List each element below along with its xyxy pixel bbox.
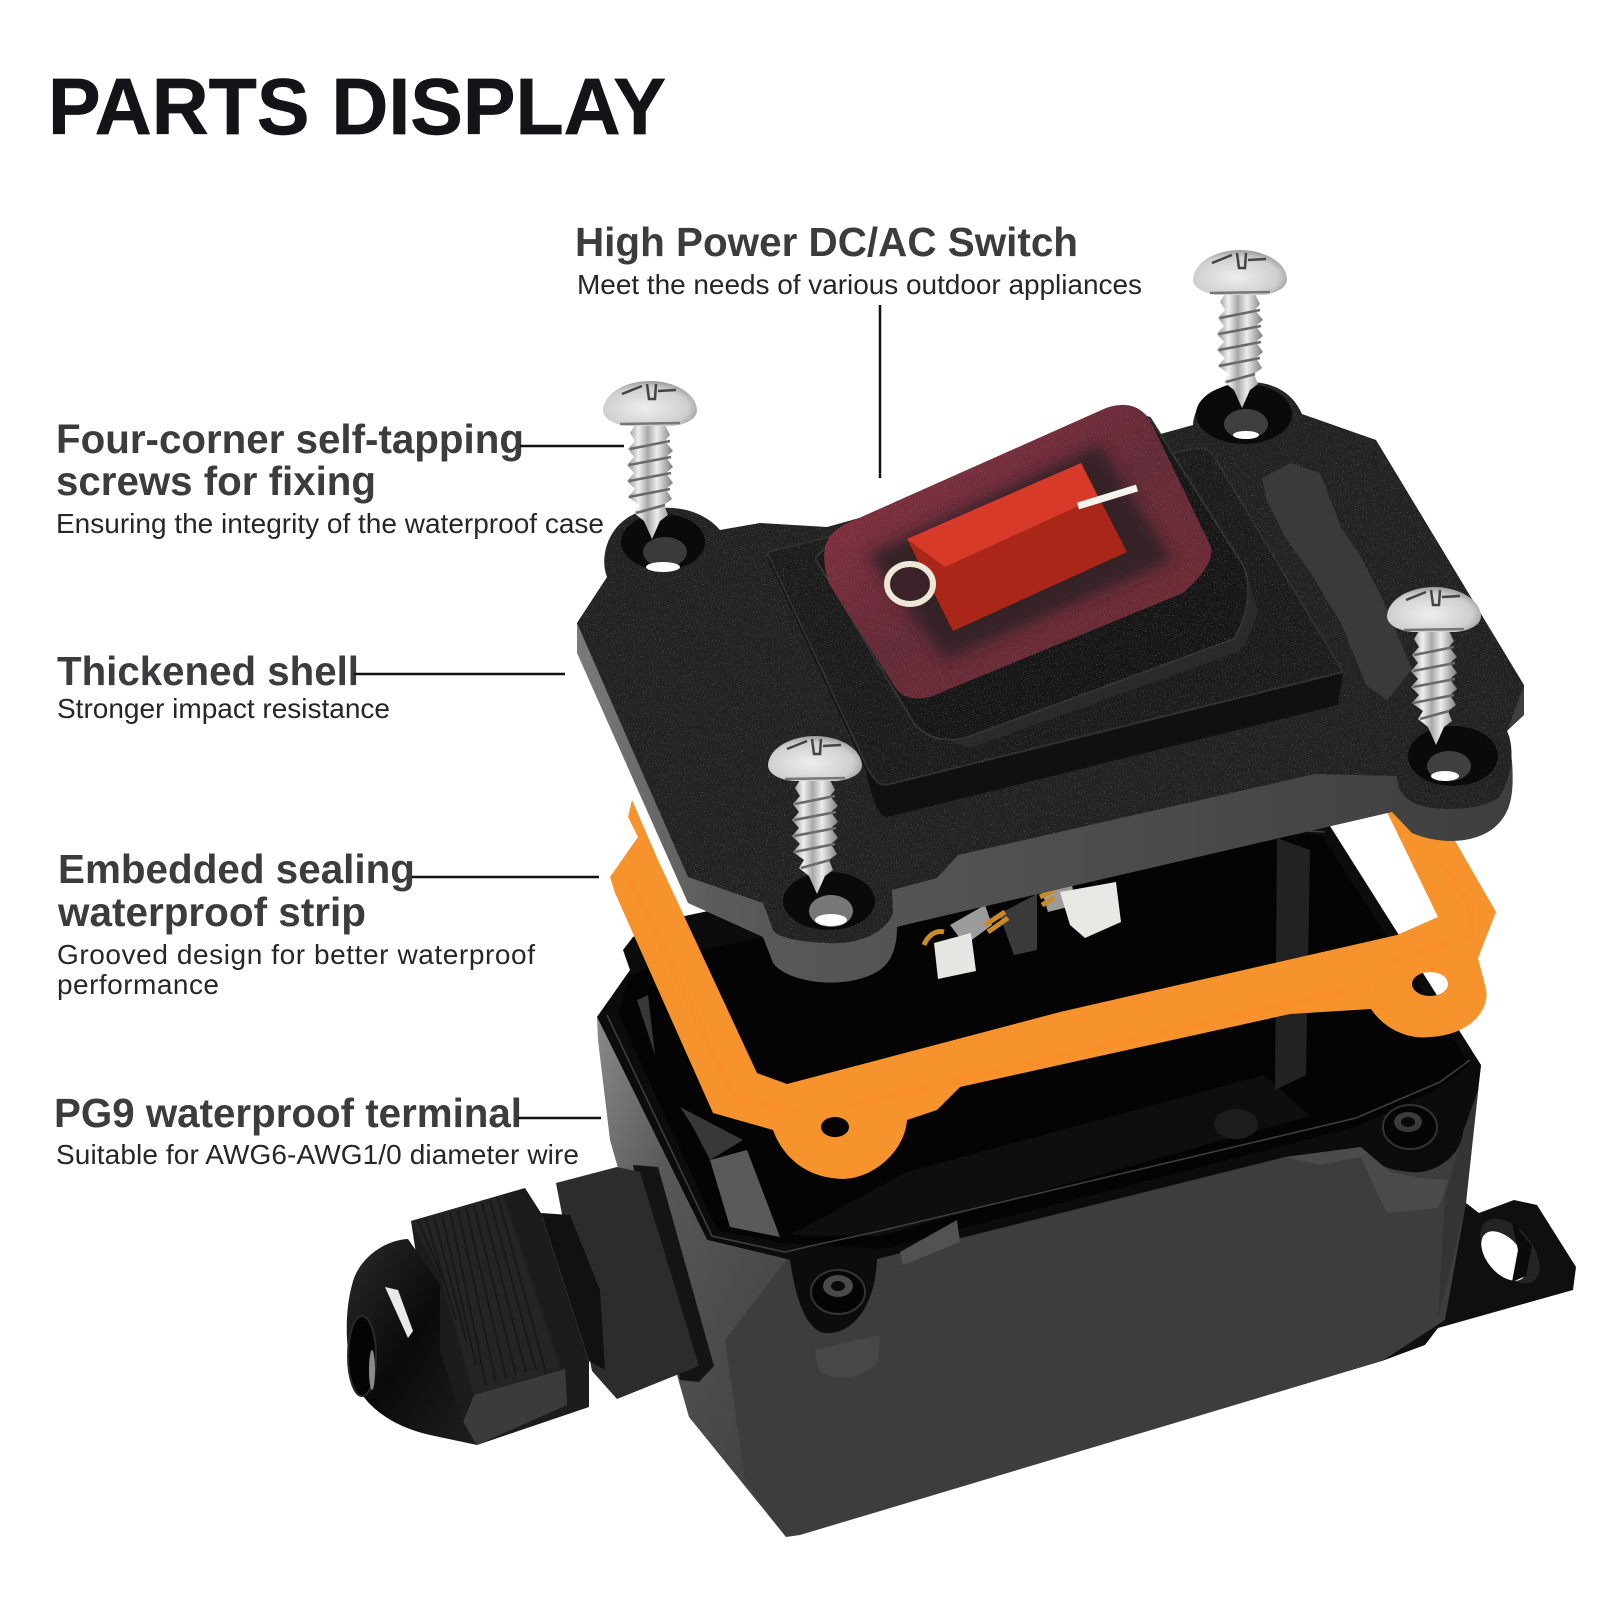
leader line [879, 305, 881, 478]
cable gland [347, 1165, 714, 1445]
post: left [811, 1270, 865, 1314]
interior corner wall [1275, 838, 1310, 1090]
boot lower fold [930, 567, 1258, 748]
silver clips [950, 875, 1076, 945]
nut ribs [411, 1195, 561, 1395]
description: Suitable for AWG6-AWG1/0 diameter wire [56, 1139, 579, 1170]
interior left corner [710, 1150, 780, 1237]
description: Grooved design for better waterproof [57, 939, 535, 970]
screw: top right [1193, 250, 1287, 408]
heading: High Power DC/AC Switch [575, 219, 1078, 265]
lid side band [577, 623, 1524, 983]
switch base [767, 452, 1343, 817]
description: Meet the needs of various outdoor appliances [577, 269, 1142, 300]
right edge strip [1438, 1065, 1481, 1320]
mounting hole [1214, 1109, 1258, 1139]
hole light [369, 1350, 375, 1390]
screw: front [768, 736, 862, 894]
centre tab [999, 894, 1037, 955]
heading: Thickened shell [57, 648, 359, 694]
description: Stronger impact resistance [57, 693, 390, 724]
off mark [887, 564, 933, 604]
leader line [518, 1117, 601, 1119]
interior [618, 832, 1470, 1249]
screw: top left [603, 381, 697, 539]
lens [824, 405, 1211, 698]
nut [411, 1188, 589, 1445]
screw hole: top right [1196, 384, 1292, 444]
mounting flange [1382, 1200, 1576, 1361]
enclosure box [597, 825, 1576, 1537]
rubber boot [815, 408, 1248, 740]
neck [541, 1213, 605, 1370]
leader line [354, 673, 565, 675]
post: right [1383, 1105, 1437, 1149]
callout: switch [575, 219, 1142, 478]
heading: Four-corner self-tapping [56, 416, 524, 462]
dome highlight [385, 1287, 413, 1338]
springs [924, 890, 1054, 945]
lens inner shade [868, 445, 1172, 660]
right shoulder [1285, 1147, 1448, 1213]
washer [633, 1165, 714, 1382]
on mark [1078, 488, 1137, 506]
description second line: performance [57, 969, 219, 1000]
callout: shell [57, 648, 565, 724]
switch lid [577, 382, 1524, 983]
rim highlight lines [607, 830, 1470, 1252]
red window [907, 463, 1127, 631]
callout: sealing strip [57, 846, 599, 1000]
screw hole: bottom left [783, 872, 875, 930]
heading: Embedded sealing [58, 846, 415, 892]
interior left wall [637, 995, 743, 1160]
title: PARTS DISPLAY [48, 62, 666, 151]
left face [597, 1017, 820, 1537]
nut rib lines [418, 1198, 546, 1385]
gasket body [610, 800, 1496, 1179]
front face [725, 1065, 1478, 1537]
description: Ensuring the integrity of the waterproof case [56, 508, 604, 539]
rim [597, 825, 1481, 1333]
switch terminals [924, 875, 1121, 979]
switch base upper face [767, 448, 1343, 785]
red rocker switch [824, 405, 1211, 698]
gasket groove [628, 850, 1470, 1112]
heading second line: screws for fixing [56, 458, 376, 504]
lid top surface [577, 382, 1524, 943]
screw hole: bottom right [1408, 726, 1498, 786]
screw hole: top left [621, 514, 705, 572]
callout: screws [56, 416, 624, 539]
heading second line: waterproof strip [57, 889, 366, 935]
nut lower face [462, 1369, 567, 1445]
red window highlight [907, 463, 1098, 567]
lock nut [556, 1167, 699, 1399]
terminal tab left [934, 933, 976, 979]
leader line [412, 876, 599, 878]
orange sealing gasket [610, 800, 1496, 1179]
terminal tab right [1060, 882, 1121, 938]
screw: right [1387, 587, 1481, 745]
left shoulder [900, 1220, 960, 1265]
dome [347, 1239, 477, 1445]
interior floor [790, 1075, 1310, 1236]
heading: PG9 waterproof terminal [54, 1090, 522, 1136]
blacked-out label [1262, 463, 1412, 700]
left post lobe [815, 1335, 880, 1378]
leader line [520, 445, 624, 447]
cable hole [348, 1316, 376, 1396]
callout: terminal [54, 1090, 601, 1170]
